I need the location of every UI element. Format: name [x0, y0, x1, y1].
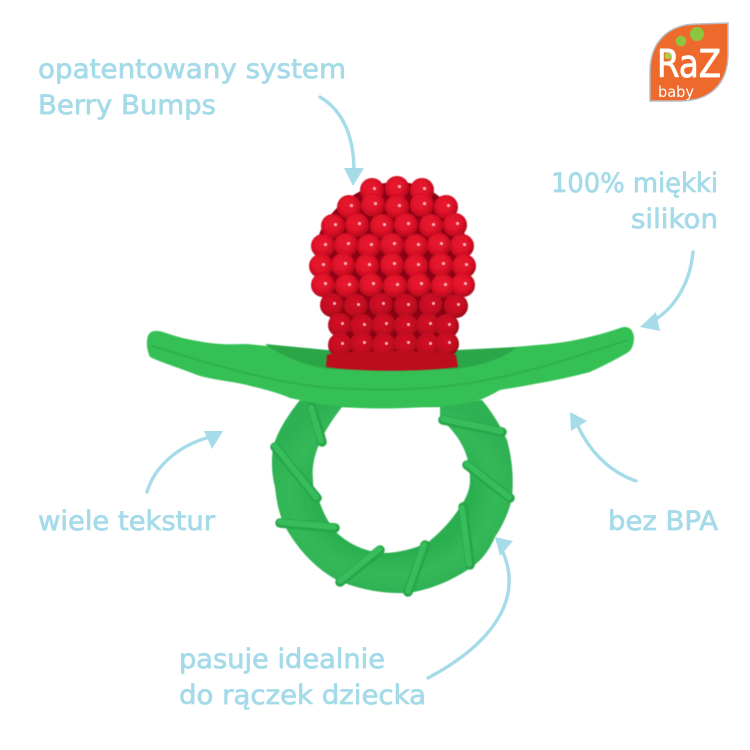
teether ring: [272, 400, 513, 593]
heading: opatentowany system Berry Bumps: [38, 54, 346, 121]
arrow: to shield tip: [640, 252, 693, 331]
ring ridges: [275, 407, 510, 592]
label: pasuje idealnie do rączek dziecka: [179, 644, 426, 711]
label: 100% miękki silikon: silikon: [631, 204, 718, 235]
arrow: to shield bottom left: [147, 431, 223, 492]
label: pasuje idealnie do rączek dziecka: do rączek dziecka: [179, 680, 426, 711]
label: bez BPA: bez BPA: [608, 506, 719, 537]
arrow: to ring: [428, 537, 513, 678]
label: 100% miękki silikon: [551, 168, 718, 235]
logo: RaZ baby: RaZ: [657, 42, 721, 86]
label: 100% miękki silikon: 100% miękki: [551, 168, 718, 199]
arrow: to shield bottom right: [570, 412, 636, 481]
label: pasuje idealnie do rączek dziecka: pasuje idealnie: [179, 644, 385, 675]
heading: opatentowany system Berry Bumps: Berry Bumps: [38, 90, 216, 121]
arrow: to raspberry: [320, 97, 364, 186]
label: wiele tekstur: wiele tekstur: [38, 506, 216, 537]
logo: RaZ baby: baby: [658, 83, 694, 101]
raspberry: [309, 176, 476, 371]
teether shield: [147, 327, 634, 408]
heading: opatentowany system Berry Bumps: opatentowany system: [38, 54, 346, 85]
logo: RaZ baby: [650, 23, 728, 101]
